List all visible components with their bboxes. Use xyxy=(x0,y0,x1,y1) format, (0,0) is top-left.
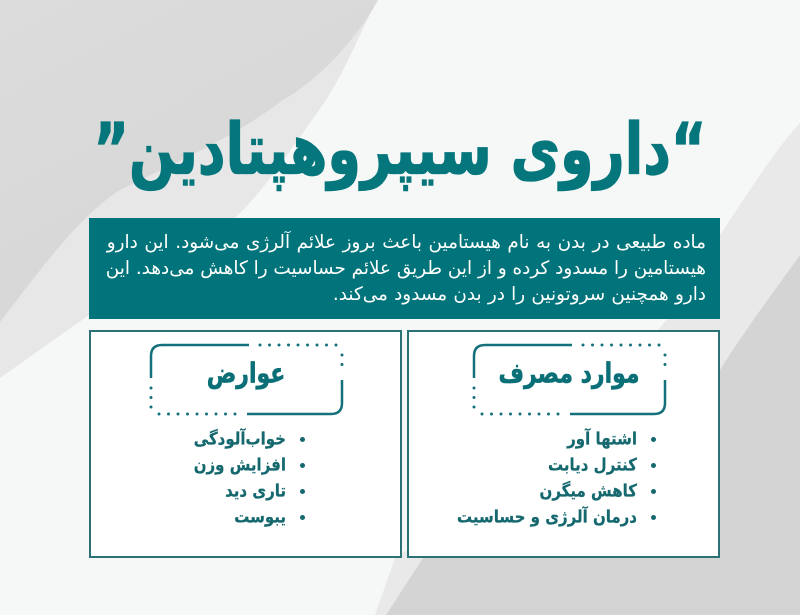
list: uses: کاهش میگرن xyxy=(540,481,637,501)
intro text band: هیستامین را مسدود کرده و از این طریق علائم حساسیت را کاهش می‌دهد. این xyxy=(106,258,706,279)
list: side effects xyxy=(194,428,305,527)
heading frame: side effects xyxy=(150,344,344,416)
list: side effects: تاری دید xyxy=(225,481,286,501)
intro text band: دارو همچنین سروتونین را در بدن مسدود می‌کند. xyxy=(333,284,706,305)
list: side effects: افزایش وزن xyxy=(194,455,286,475)
heading: side effects: عوارض xyxy=(207,359,285,390)
list: uses: کنترل دیابت xyxy=(548,455,637,475)
heading: uses: موارد مصرف xyxy=(498,359,640,390)
title: “داروی سیپروهپتادین” xyxy=(94,108,706,190)
list: uses: اشتها آور xyxy=(567,429,637,449)
intro text band: ماده طبیعی در بدن به نام هیستامین باعث بروز علائم آلرژی می‌شود. این دارو xyxy=(107,232,706,253)
panel: uses xyxy=(407,330,720,558)
list: side effects: خواب‌آلودگی xyxy=(194,429,286,449)
heading frame: uses xyxy=(472,344,666,416)
intro text band xyxy=(89,218,720,319)
list: uses xyxy=(457,428,656,527)
list: uses: درمان آلرژی و حساسیت xyxy=(457,507,637,527)
list: side effects: یبوست xyxy=(234,507,286,527)
panel: side effects xyxy=(89,330,402,558)
